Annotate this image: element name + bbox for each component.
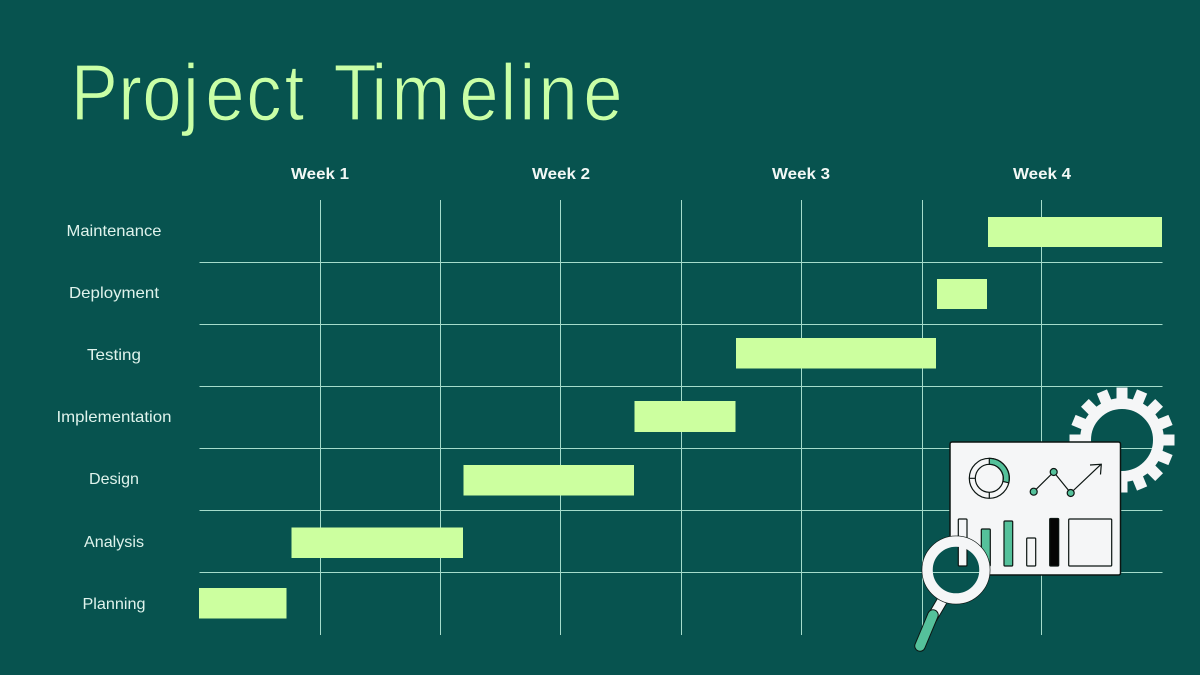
- title: Project Timeline: [71, 48, 623, 137]
- week headers: Week 1: [291, 166, 349, 183]
- task labels: Maintenance: [66, 223, 162, 240]
- handle: [920, 601, 942, 646]
- task labels: [56, 223, 172, 613]
- line chart with arrow: [1030, 464, 1101, 496]
- week headers: Week 2: [532, 166, 590, 183]
- task labels: Deployment: [69, 285, 160, 302]
- lens opening: [932, 546, 980, 594]
- task labels: Testing: [87, 347, 141, 364]
- panel: dashboard card: [950, 442, 1120, 575]
- task labels: Planning: [82, 596, 146, 613]
- task labels: Implementation: [56, 409, 172, 426]
- task labels: Analysis: [84, 534, 144, 551]
- task labels: Design: [89, 471, 139, 488]
- icon: magnifying glass: [920, 518, 1112, 646]
- week headers: Week 3: [772, 166, 830, 183]
- bar chart: [958, 518, 1112, 566]
- week headers: [291, 166, 1071, 183]
- icon: donut chart: [969, 458, 1009, 498]
- icon: gear: [1070, 388, 1174, 492]
- week headers: Week 4: [1013, 166, 1071, 183]
- gantt bars: [199, 217, 1162, 618]
- gantt grid: [200, 200, 1162, 635]
- lens ring: [922, 536, 990, 604]
